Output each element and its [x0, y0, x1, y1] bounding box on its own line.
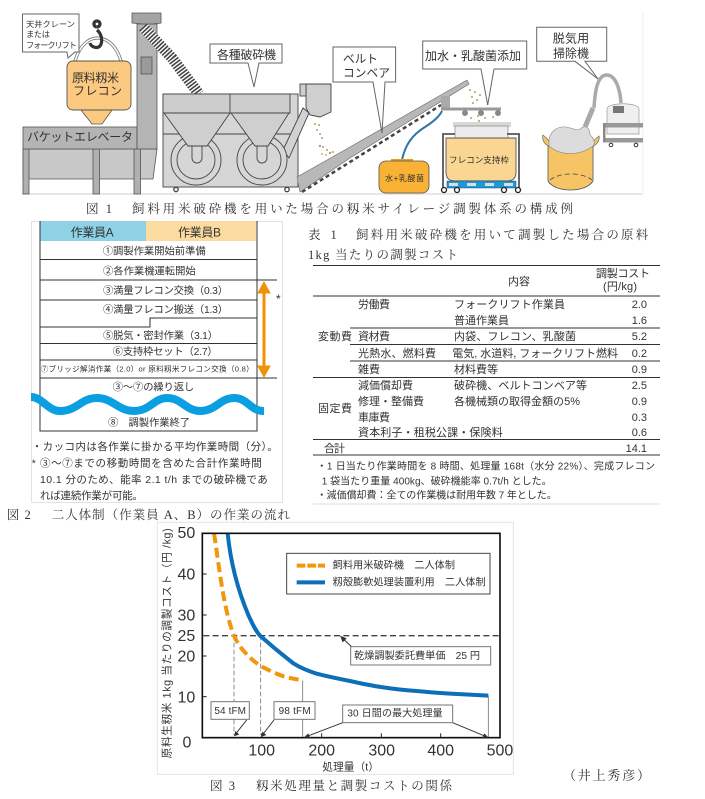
variable costs: フォークリフト作業員 — [454, 298, 565, 311]
caption: figure 2: 図 2 — [7, 508, 31, 522]
fixed costs: 0.6 — [632, 427, 647, 439]
fixed costs — [318, 378, 647, 439]
curve: rice husk softening equipment — [228, 533, 488, 696]
variable costs: 材料費等 — [454, 362, 498, 376]
table notes: ・1 日当たり作業時間を 8 時間、処理量 168t（水分 22%）、完成フレコン — [317, 459, 655, 472]
y-axis labels — [178, 525, 195, 752]
callout: crushers: 各種破砕機 — [217, 47, 276, 62]
variable costs: 雑費 — [358, 362, 380, 376]
notes: ・カッコ内は各作業に掛かる平均作業時間（分）。 — [32, 440, 278, 453]
work steps: ③～⑦の繰り返し — [113, 381, 194, 394]
table notes — [317, 459, 655, 501]
fixed costs: 0.9 — [632, 396, 647, 408]
variable costs: 変動費 — [318, 329, 352, 343]
large bag being degassed — [543, 127, 599, 190]
y-axis labels: 40 — [178, 567, 195, 584]
callout: 98 tFM — [261, 702, 315, 737]
fixed costs: 固定費 — [318, 401, 352, 415]
panel: table 1 cost table — [313, 266, 660, 504]
callout: crane or forklift — [22, 14, 79, 58]
variable costs: 0.9 — [632, 364, 647, 376]
table header: 内容 — [508, 274, 530, 288]
work steps: ④満量フレコン搬送（1.3） — [103, 303, 228, 316]
notes: * ③～⑦までの移動時間を含めた合計作業時間 — [32, 457, 262, 470]
x-axis labels: 500 — [487, 743, 513, 760]
callout: crane or forklift: または — [26, 30, 50, 39]
bucket elevator: バケットエレベータ — [27, 130, 133, 144]
fixed costs: 2.5 — [632, 380, 647, 392]
callout: 54 tFM — [211, 702, 249, 736]
variable costs: 5.2 — [632, 331, 647, 343]
worker headers — [40, 221, 256, 241]
y-axis labels: 30 — [178, 608, 195, 625]
work steps: ③満量フレコン交換（0.3） — [103, 285, 228, 297]
worker headers: 作業員B — [178, 226, 221, 240]
worker headers: 作業員A — [71, 226, 114, 240]
work steps — [41, 244, 254, 429]
callout: belt conveyor: コンベア — [343, 67, 390, 80]
panel: figure 2 work flow — [31, 221, 282, 502]
heading: table 1: 飼料用米破砕機を用いて調製した場合の原料 — [356, 227, 649, 242]
work steps: ②各作業機運転開始 — [103, 264, 196, 278]
callout: crane or forklift: 天井クレーン — [26, 19, 75, 29]
callout: maximum throughput in 30 days: 30 日間の最大処理量 — [347, 707, 443, 720]
arrow: cycle span — [258, 282, 270, 377]
x-axis labels: 200 — [308, 743, 335, 760]
table header — [508, 266, 650, 293]
notes: 10.1 分のため、能率 2.1 t/h までの破砕機であ — [40, 473, 268, 486]
table header: 調製コスト — [596, 266, 650, 280]
notes: れば連続作業が可能。 — [40, 489, 143, 502]
panel: figure 3 line chart — [157, 522, 513, 774]
caption: figure 2: 二人体制（作業員 A、B）の作業の流れ — [52, 507, 290, 522]
callout: water and lactic acid bacteria — [423, 41, 527, 105]
bag of raw rice with hook: 原料籾米 — [72, 71, 119, 85]
x-axis title: 処理量（t） — [322, 761, 379, 774]
callout: consignment price — [340, 636, 491, 665]
callout: belt conveyor — [333, 47, 396, 133]
variable costs — [318, 297, 647, 376]
callout: 54 tFM: 54 tFM — [214, 706, 246, 717]
callout: belt conveyor: ベルト — [343, 53, 378, 66]
crusher machine — [163, 84, 331, 192]
table notes: ・減価償却費：全ての作業機は耐用年数 7 年とした。 — [317, 488, 557, 501]
table notes: 1 袋当たり重量 400kg、破砕機能率 0.7t/h とした。 — [322, 474, 552, 487]
panel: figure 2 work flow: * — [276, 292, 281, 306]
callout: crushers — [210, 44, 282, 87]
heading: table 1: 表 1 — [308, 228, 337, 242]
bucket elevator — [23, 13, 161, 194]
total row — [324, 441, 647, 455]
spiral conveyor — [143, 27, 199, 94]
axis ticks — [202, 574, 441, 738]
variable costs: 光熱水、燃料費 — [358, 346, 436, 360]
legend: 飼料用米破砕機 二人体制 — [333, 558, 455, 571]
caption: figure 3: 図 3 — [210, 779, 235, 793]
callout: crane or forklift: フォークリフト — [26, 41, 77, 50]
variable costs: 2.0 — [632, 299, 647, 311]
total row: 合計 — [324, 441, 345, 455]
plot frame — [202, 533, 500, 738]
bag support frame — [442, 122, 520, 192]
y-axis labels: 10 — [178, 689, 195, 706]
callout: consignment price: 乾燥調製委託費単価 25 円 — [354, 649, 480, 662]
work steps: ①調製作業開始前準備 — [103, 244, 206, 258]
author credit: （井上秀彦） — [563, 768, 650, 783]
legend: 籾殻膨軟処理装置利用 二人体制 — [333, 575, 486, 588]
variable costs: 電気, 水道料, フォークリフト燃料 — [452, 346, 618, 360]
heading: table 1: 1kg 当たりの調製コスト — [308, 247, 458, 262]
work steps: ⑦ブリッジ解消作業（2.0）or 原料籾米フレコン交換（0.8） — [41, 364, 254, 374]
variable costs: 1.6 — [632, 315, 647, 327]
wave break — [31, 397, 264, 411]
callout: 98 tFM: 98 tFM — [279, 706, 311, 717]
variable costs: 労働費 — [358, 297, 390, 311]
threshold line 25 yen — [203, 634, 500, 638]
caption: figure 1: 飼料用米破砕機を用いた場合の籾米サイレージ調製体系の構成例 — [132, 201, 573, 216]
y-axis labels: 20 — [178, 649, 195, 666]
total row: 14.1 — [626, 443, 647, 455]
hose and tank — [379, 111, 442, 193]
x-axis labels — [248, 743, 513, 760]
callout: maximum throughput in 30 days — [304, 705, 488, 738]
panel: figure 1 equipment diagram — [22, 12, 643, 194]
table header: (円/kg) — [603, 281, 637, 293]
work steps: ⑧ 調製作業終了 — [108, 416, 190, 429]
vacuum cleaner — [585, 75, 643, 147]
hose and tank: 水+乳酸菌 — [385, 173, 424, 183]
fixed costs: 減価償却費 — [358, 378, 413, 392]
y-axis title: 原料生籾米 1kg 当たりの調製コスト（円 /kg) — [160, 528, 173, 758]
y-axis labels: 25 — [178, 628, 195, 645]
heading: table 1 — [308, 227, 649, 262]
notes — [32, 440, 278, 502]
callout: water and lactic acid bacteria: 加水・乳酸菌添加 — [425, 49, 521, 63]
curve: feed rice crusher — [214, 533, 303, 681]
fixed costs: 車庫費 — [358, 410, 390, 424]
variable costs: 0.2 — [632, 348, 647, 360]
bag of raw rice with hook: フレコン — [73, 84, 122, 98]
callout: degassing vacuum — [537, 27, 607, 79]
work steps: ⑥支持枠セット（2.7） — [113, 345, 218, 358]
fixed costs: 0.3 — [632, 412, 647, 424]
grains falling — [314, 89, 494, 156]
x-axis labels: 400 — [427, 743, 454, 760]
spray pipe with nozzles — [441, 108, 501, 116]
fixed costs: 修理・整備費 — [358, 394, 424, 408]
variable costs: 普通作業員 — [454, 313, 509, 327]
callout: degassing vacuum: 掃除機 — [553, 45, 589, 60]
legend — [287, 553, 490, 594]
fixed costs: 破砕機、ベルトコンベア等 — [454, 378, 587, 392]
x-axis labels: 300 — [368, 743, 395, 760]
y-axis labels: 50 — [178, 525, 195, 542]
variable costs: 資材費 — [358, 329, 390, 343]
bag support frame: フレコン支持枠 — [449, 154, 509, 165]
fixed costs: 各機械類の取得金額の5% — [454, 394, 580, 408]
x-axis labels: 100 — [248, 743, 275, 760]
work steps: ⑤脱気・密封作業（3.1） — [103, 329, 218, 342]
caption: figure 3: 籾米処理量と調製コストの関係 — [256, 778, 452, 793]
bag of raw rice with hook — [67, 21, 131, 124]
variable costs: 内袋、フレコン、乳酸菌 — [454, 329, 576, 343]
caption: figure 1: 図 1 — [86, 202, 112, 216]
fixed costs: 資本利子・租税公課・保険料 — [358, 425, 503, 439]
y-axis labels: 0 — [182, 735, 191, 752]
belt conveyor — [297, 80, 469, 192]
callout: degassing vacuum: 脱気用 — [553, 31, 589, 46]
